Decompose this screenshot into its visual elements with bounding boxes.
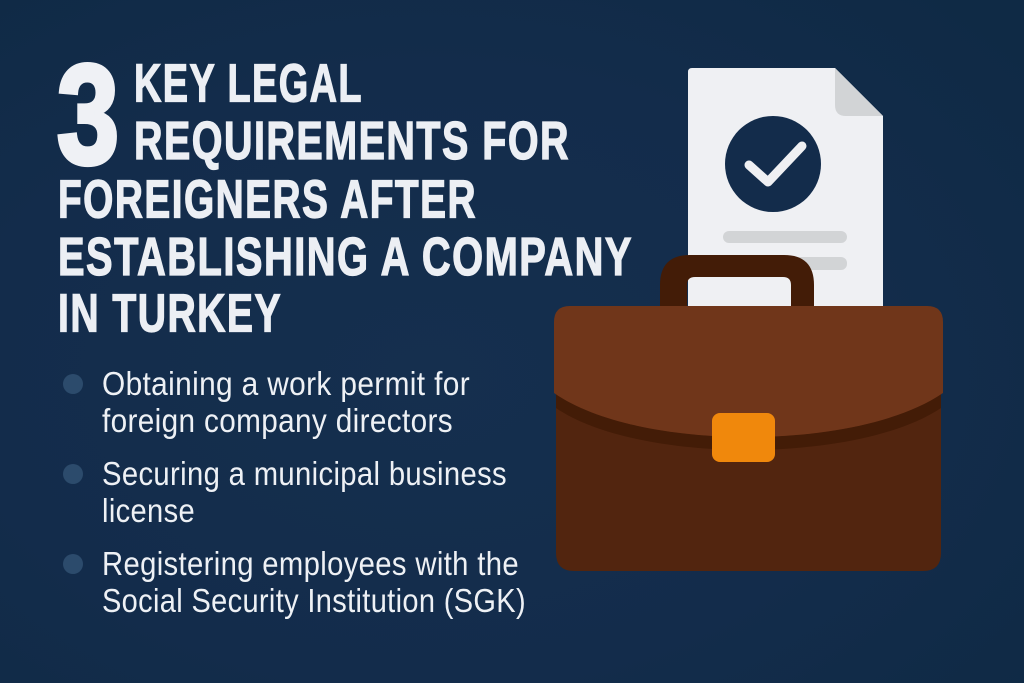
text line 2 <box>740 257 847 270</box>
bullet 3 <box>63 554 83 574</box>
flap shadow band <box>556 393 941 450</box>
item 3 line 2: Social Security Institution (SGK) <box>102 582 526 619</box>
page fold <box>835 68 883 116</box>
title line 1: KEY LEGAL <box>134 54 363 114</box>
briefcase handle <box>660 255 814 306</box>
briefcase body <box>556 380 941 571</box>
item 2 line 2: license <box>102 492 195 529</box>
bullet 2 <box>63 464 83 484</box>
check mark <box>749 146 802 182</box>
item 1 line 2: foreign company directors <box>102 402 453 439</box>
clasp <box>712 413 775 462</box>
item 2 line 1: Securing a municipal business <box>102 455 507 492</box>
big number 3: 3 <box>57 35 119 193</box>
check circle <box>725 116 821 212</box>
icon: document with check mark <box>688 68 883 306</box>
list of requirements <box>63 365 526 619</box>
title line 5: IN TURKEY <box>58 284 282 344</box>
icon: briefcase <box>554 255 943 571</box>
bullet 1 <box>63 374 83 394</box>
title <box>57 35 633 344</box>
title line 3: FOREIGNERS AFTER <box>58 170 477 230</box>
document page <box>688 68 883 306</box>
briefcase flap <box>554 306 943 437</box>
text line 1 <box>723 231 847 243</box>
title line 4: ESTABLISHING A COMPANY <box>58 227 633 287</box>
item 3 line 1: Registering employees with the <box>102 545 519 582</box>
title line 2: REQUIREMENTS FOR <box>134 111 570 171</box>
item 1 line 1: Obtaining a work permit for <box>102 365 470 402</box>
